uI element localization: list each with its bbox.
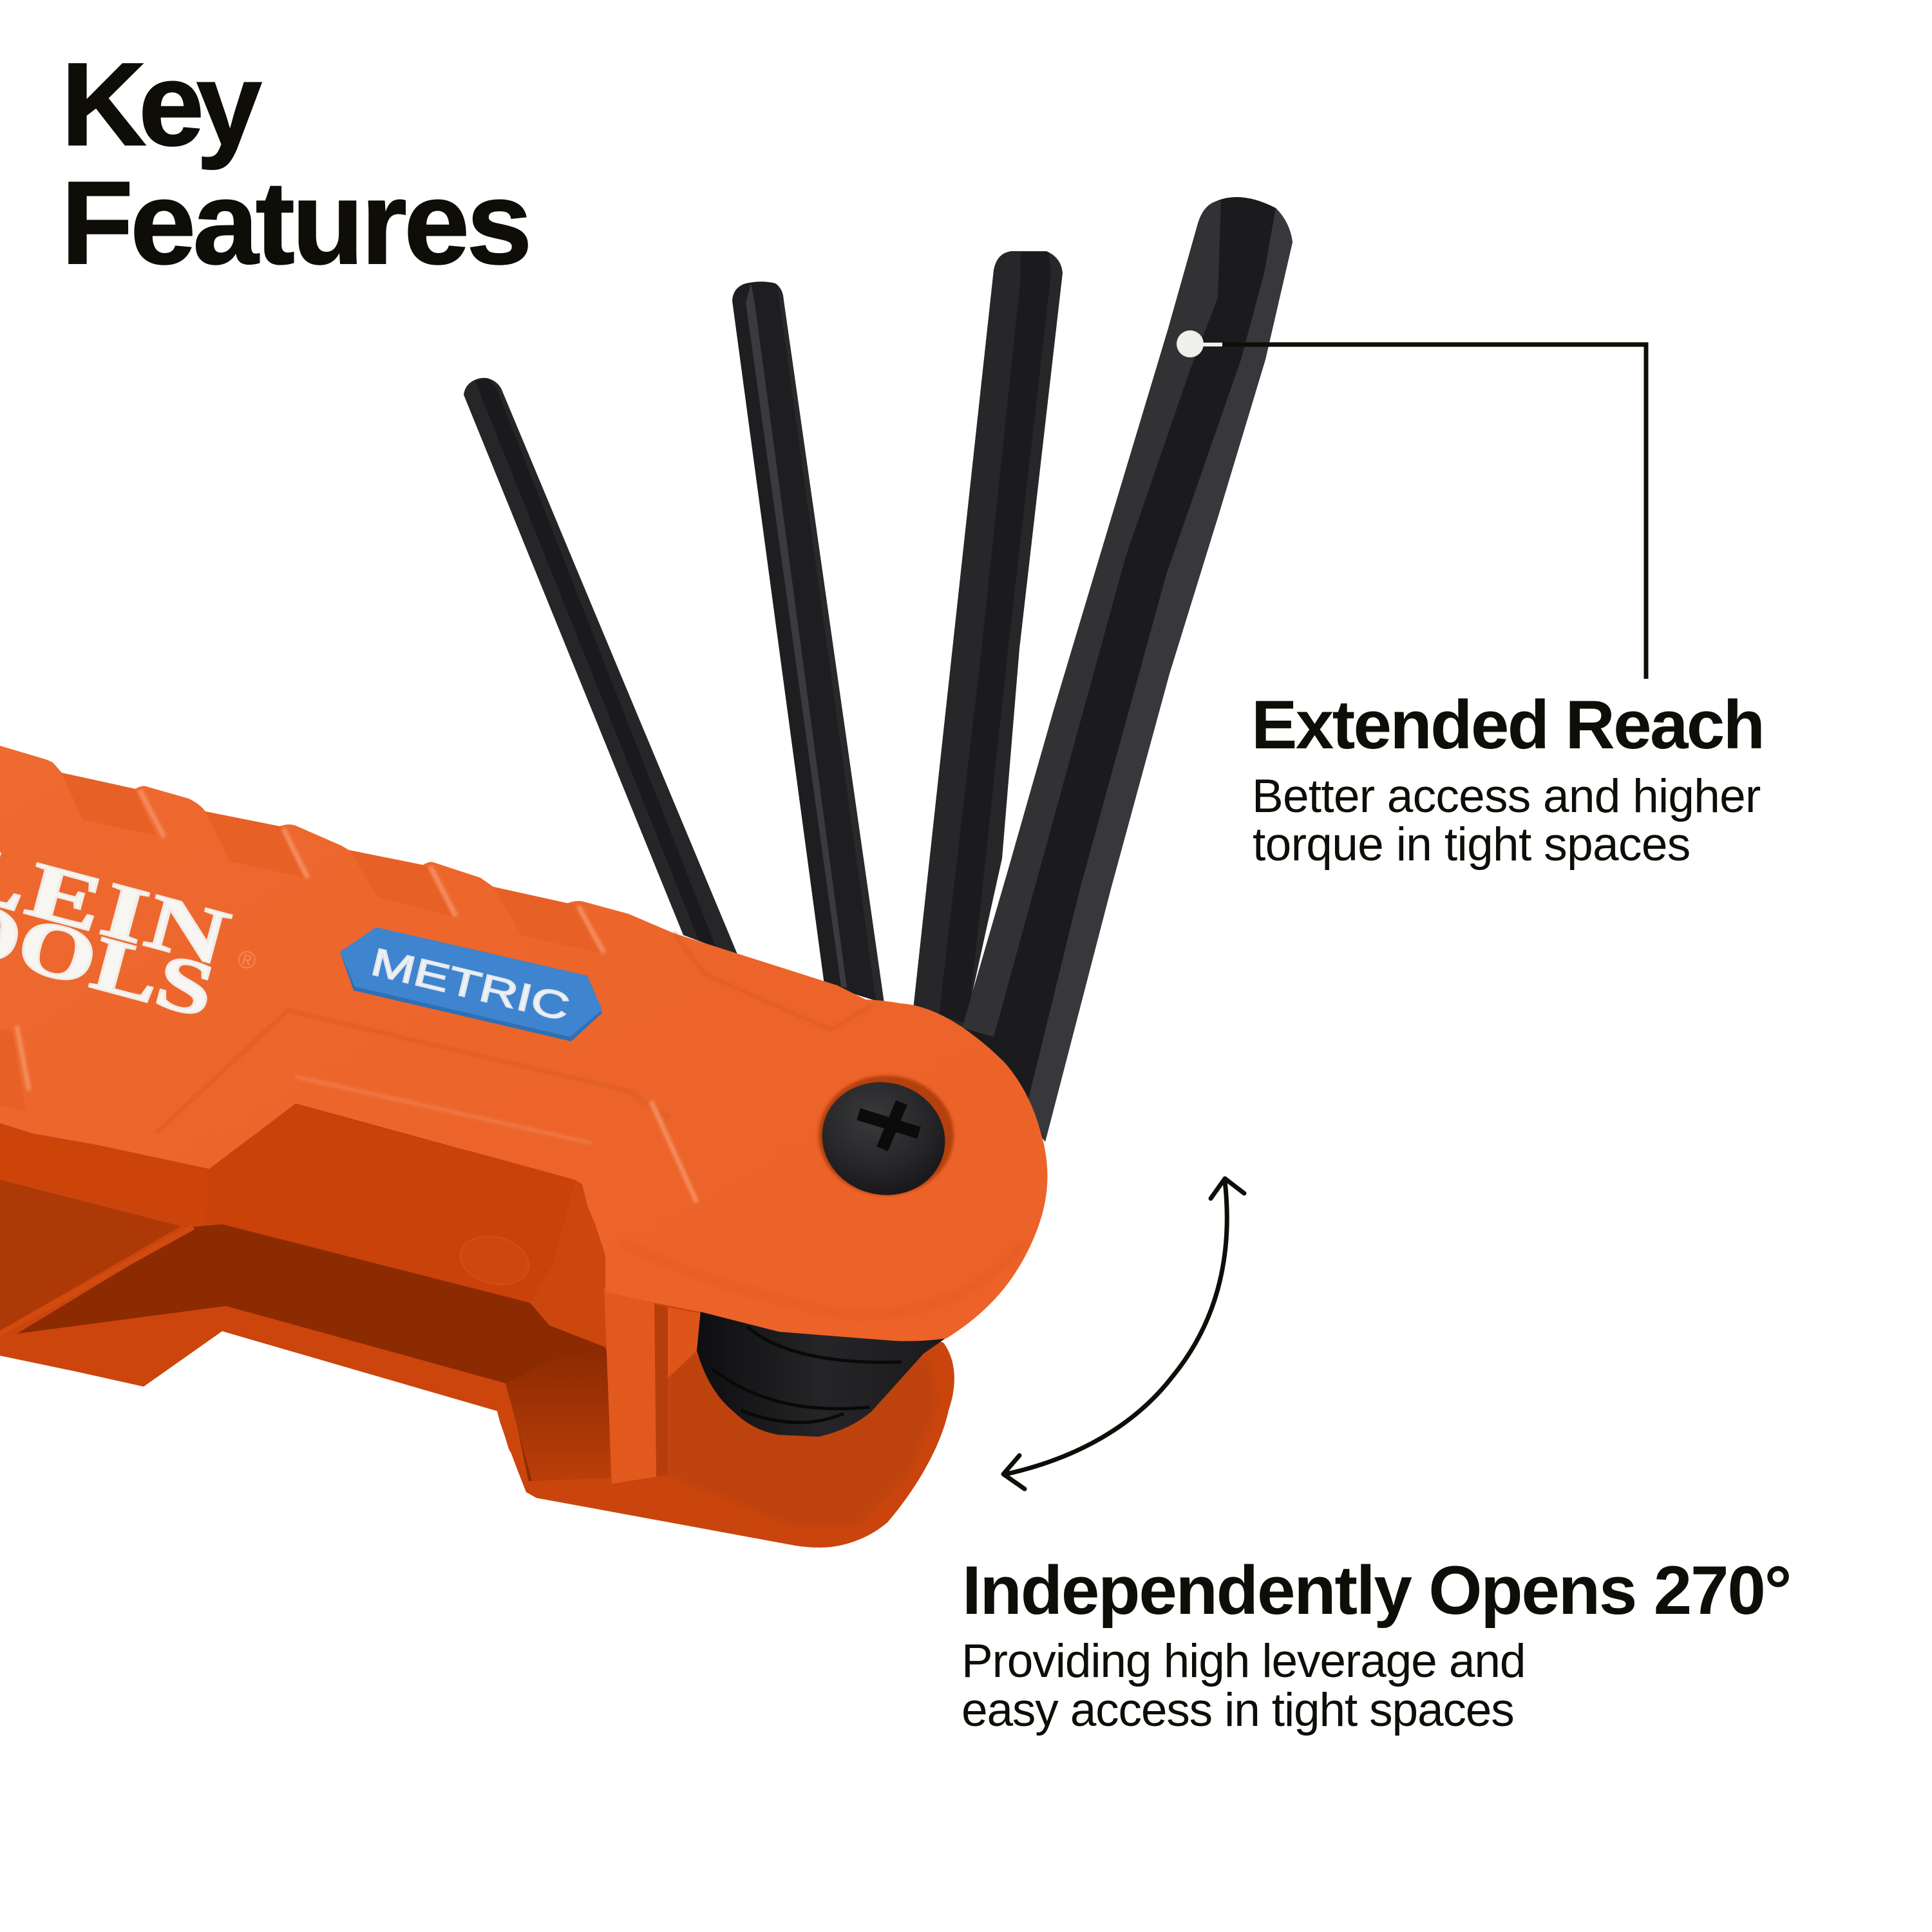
light inner panel xyxy=(668,1307,702,1378)
metric badge xyxy=(340,927,602,1041)
hex key 1 xyxy=(464,378,738,956)
grip ridges xyxy=(0,773,604,1112)
metric badge: METRIC xyxy=(367,940,574,1029)
dark floor band xyxy=(17,1224,608,1481)
disc inner shading xyxy=(668,1350,937,1525)
hex key 2 xyxy=(732,281,884,1003)
feature text: extended reach: Extended Reach xyxy=(1251,686,1763,763)
feature text: opens 270 degrees xyxy=(961,1551,1790,1736)
logo: Klein Tools: ® xyxy=(234,945,259,976)
hex key 3 xyxy=(913,251,1063,1028)
title: Key xyxy=(61,38,261,170)
feature text: opens 270 degrees: easy access in tight spaces xyxy=(961,1684,1514,1736)
molded circle mark xyxy=(455,1229,534,1291)
feature text: extended reach: torque in tight spaces xyxy=(1253,819,1690,871)
interior back wall xyxy=(205,1103,587,1303)
cap lip shading xyxy=(621,1243,1024,1315)
feature text: opens 270 degrees: Providing high leverage and xyxy=(961,1635,1525,1687)
hex key 4 xyxy=(962,197,1293,1142)
callout leader: extended reach xyxy=(1177,330,1646,679)
rotation arrow xyxy=(1003,1179,1244,1489)
left dark triangle xyxy=(0,1180,181,1331)
interior wall beside strut xyxy=(530,1180,605,1347)
wall shading by strut xyxy=(506,1349,611,1481)
hex keys xyxy=(464,197,1293,1142)
feature text: extended reach: Better access and higher xyxy=(1252,770,1761,822)
center strut xyxy=(604,1288,656,1484)
lower side rim xyxy=(0,1306,529,1485)
handle top face xyxy=(0,746,1047,1341)
molded rib xyxy=(0,1227,193,1334)
handle body xyxy=(0,1103,954,1548)
feature text: extended reach xyxy=(1251,686,1763,871)
pivot screw xyxy=(810,1068,958,1209)
title xyxy=(61,38,529,289)
pivot cylinder xyxy=(697,1311,949,1437)
molded creases xyxy=(156,933,873,1202)
lower plate and disc xyxy=(0,1123,954,1548)
feature text: opens 270 degrees: Independently Opens 270° xyxy=(962,1551,1790,1629)
slit by strut xyxy=(654,1304,668,1477)
title: Features xyxy=(61,156,529,289)
interior left recess xyxy=(0,1127,209,1223)
